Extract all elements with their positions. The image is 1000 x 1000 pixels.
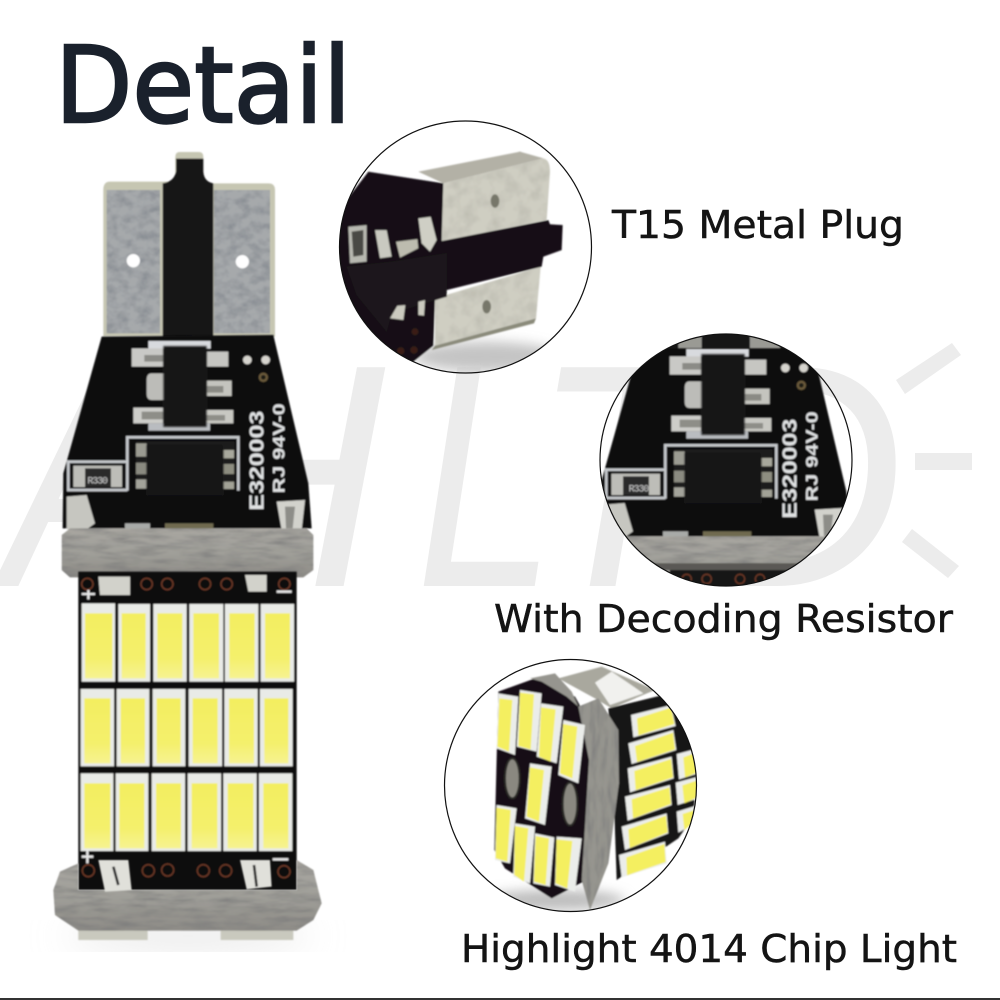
LED row 1 <box>82 603 294 682</box>
metal base <box>53 860 322 940</box>
decoding board <box>62 335 313 577</box>
background watermark <box>0 299 972 654</box>
LED array board <box>78 572 297 890</box>
callout circle: T15 metal plug <box>330 121 592 378</box>
background watermark: A <box>0 299 175 654</box>
decoding board: RJ 94V-0 <box>269 403 288 493</box>
title: Detail <box>55 25 351 147</box>
label: With Decoding Resistor: With Decoding Resistor <box>494 597 953 641</box>
bulb main photo <box>53 152 322 944</box>
front LEDs <box>495 690 585 892</box>
decoding board: R330 <box>87 475 108 486</box>
background watermark: L <box>416 299 556 654</box>
callout circle: decoding resistor <box>600 325 852 590</box>
bulb shadow <box>63 928 313 944</box>
metal plug <box>103 152 275 340</box>
LED row 2 <box>81 689 293 766</box>
background watermark: H <box>160 299 389 654</box>
callout circle: 4014 chip light <box>444 660 698 912</box>
background watermark: T <box>532 299 719 654</box>
callout circle: decoding resistor: RJ 94V-0 <box>802 411 821 501</box>
bulb side shadow <box>485 890 625 910</box>
plug shadow <box>413 342 560 372</box>
label: Highlight 4014 Chip Light: Highlight 4014 Chip Light <box>461 927 957 971</box>
side LEDs <box>619 705 698 877</box>
label: T15 Metal Plug: T15 Metal Plug <box>611 203 904 247</box>
background watermark: D <box>695 299 905 654</box>
decoding board: E320003 <box>245 411 268 511</box>
LED row 3 <box>81 773 292 851</box>
callout circle: decoding resistor: E320003 <box>778 419 801 519</box>
bottom edge bar <box>0 998 1000 1000</box>
callout circle: decoding resistor: R330 <box>629 483 649 494</box>
